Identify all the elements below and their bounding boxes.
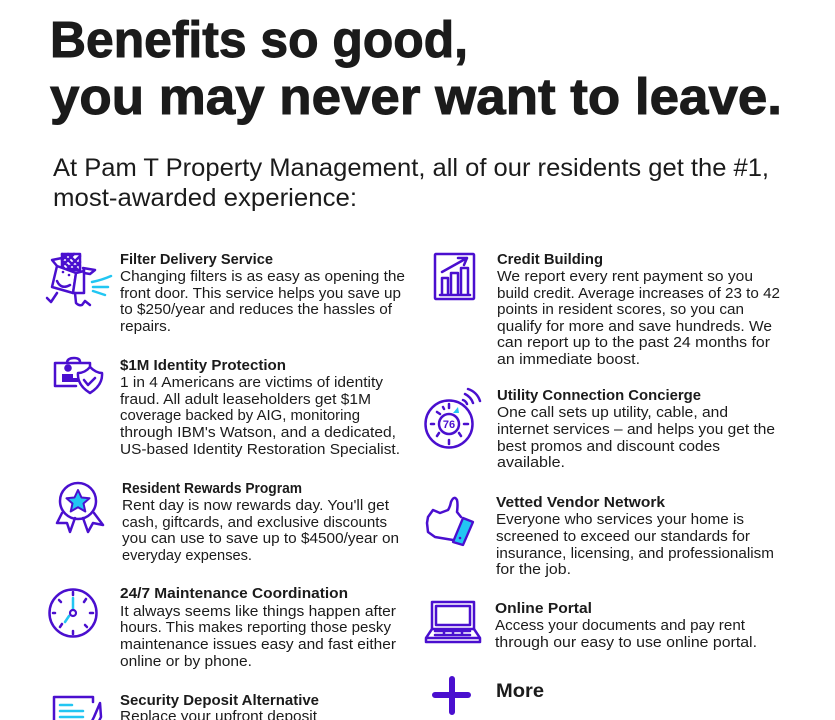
text: Utility Connection Concierge: best promos and discount codes (497, 439, 720, 455)
icon: deposit document and pen (54, 697, 101, 720)
text: Credit Building: an immediate boost. (497, 352, 640, 368)
text: Filter Delivery Service: front door. This service helps you save up (120, 286, 401, 302)
text: Filter Delivery Service: Filter Delivery Service (120, 252, 273, 268)
icon: plus (435, 679, 468, 712)
icon: thumbs up (427, 498, 473, 545)
text: Credit Building: Credit Building (497, 252, 603, 268)
text: Vetted Vendor Network: Everyone who services your home is (496, 512, 744, 528)
text: 24/7 Maintenance Coordination: 24/7 Maintenance Coordination (120, 586, 348, 602)
text: Filter Delivery Service (120, 252, 405, 335)
text: Vetted Vendor Network: Vetted Vendor Network (496, 495, 666, 511)
icon: smart thermostat (426, 389, 480, 448)
subheading: most-awarded experience: (53, 184, 357, 212)
text: Credit Building (497, 252, 780, 368)
text: Utility Connection Concierge: One call sets up utility, cable, and (497, 405, 728, 421)
title (50, 11, 782, 125)
text: Credit Building: points in resident scores, so you can (497, 302, 744, 318)
icon: credit chart (435, 254, 474, 299)
text: Filter Delivery Service: repairs. (120, 319, 171, 335)
text: Utility Connection Concierge: available. (497, 455, 565, 471)
text: More: More (496, 681, 544, 702)
icon: smart thermostat: 76 (443, 419, 455, 431)
text: Filter Delivery Service: to $250/year and reduces the hassles of (120, 302, 393, 318)
text: Vetted Vendor Network: screened to exceed our standards for (496, 529, 750, 545)
text: Credit Building: build credit. Average increases of 23 to 42 (497, 286, 780, 302)
text: 24/7 Maintenance Coordination (120, 586, 396, 670)
text: Online Portal (495, 601, 757, 651)
text: Online Portal: Online Portal (495, 601, 592, 617)
text: $1M Identity Protection: US-based Identity Restoration Specialist. (120, 442, 400, 458)
text: Resident Rewards Program: you can use to save up to $4500/year on (122, 531, 399, 547)
text: Utility Connection Concierge (497, 388, 775, 471)
text: Vetted Vendor Network (496, 495, 774, 578)
text: $1M Identity Protection: 1 in 4 Americans are victims of identity (120, 375, 384, 391)
text: Resident Rewards Program: Resident Rewards Program (122, 481, 302, 497)
text: $1M Identity Protection: through IBM's Watson, and a dedicated, (120, 425, 396, 441)
text: 24/7 Maintenance Coordination: It always seems like things happen after (120, 604, 396, 620)
text: Vetted Vendor Network: for the job. (496, 562, 571, 578)
text: $1M Identity Protection: $1M Identity Protection (120, 358, 286, 374)
text: 24/7 Maintenance Coordination: maintenance issues easy and fast either (120, 637, 396, 653)
text: $1M Identity Protection: coverage backed by AIG, monitoring (120, 408, 360, 424)
text: Resident Rewards Program: cash, giftcards, and exclusive discounts (122, 515, 387, 531)
icon: laptop (426, 602, 480, 642)
text: Credit Building: qualify for more and save hundreds. We (497, 319, 772, 335)
text: 24/7 Maintenance Coordination: hours. This makes reporting those pesky (120, 620, 392, 636)
icon: clock (50, 590, 96, 636)
text: Vetted Vendor Network: insurance, licensing, and professionalism (496, 546, 774, 562)
text: 24/7 Maintenance Coordination: online or by phone. (120, 654, 252, 670)
subheading: At Pam T Property Management, all of our residents get the #1, (53, 154, 769, 182)
icon: running filter box (47, 254, 111, 305)
title: Benefits so good, (50, 11, 468, 68)
subheading (53, 154, 769, 212)
text: Utility Connection Concierge: internet services – and helps you get the (497, 422, 775, 438)
text: Filter Delivery Service: Changing filters is as easy as opening the (120, 269, 405, 285)
icon: award ribbon (57, 483, 103, 532)
text: Security Deposit Alternative: Security Deposit Alternative (120, 693, 319, 709)
text: $1M Identity Protection: fraud. All adult leaseholders get $1M (120, 392, 371, 408)
text: Resident Rewards Program: Rent day is now rewards day. You'll get (122, 498, 389, 514)
text: Online Portal: Access your documents and pay rent (495, 618, 745, 634)
text: Online Portal: through our easy to use online portal. (495, 635, 757, 651)
text: Security Deposit Alternative (120, 693, 319, 720)
text: Resident Rewards Program: everyday expenses. (122, 548, 252, 564)
text: $1M Identity Protection (120, 358, 400, 458)
title: you may never want to leave. (50, 68, 782, 125)
text: Utility Connection Concierge: Utility Connection Concierge (497, 388, 701, 404)
icon: identity badge and shield (55, 358, 102, 393)
text: Credit Building: We report every rent payment so you (497, 269, 753, 285)
text: Credit Building: can report up to the past 24 months for (497, 335, 770, 351)
text: Resident Rewards Program (122, 481, 399, 564)
